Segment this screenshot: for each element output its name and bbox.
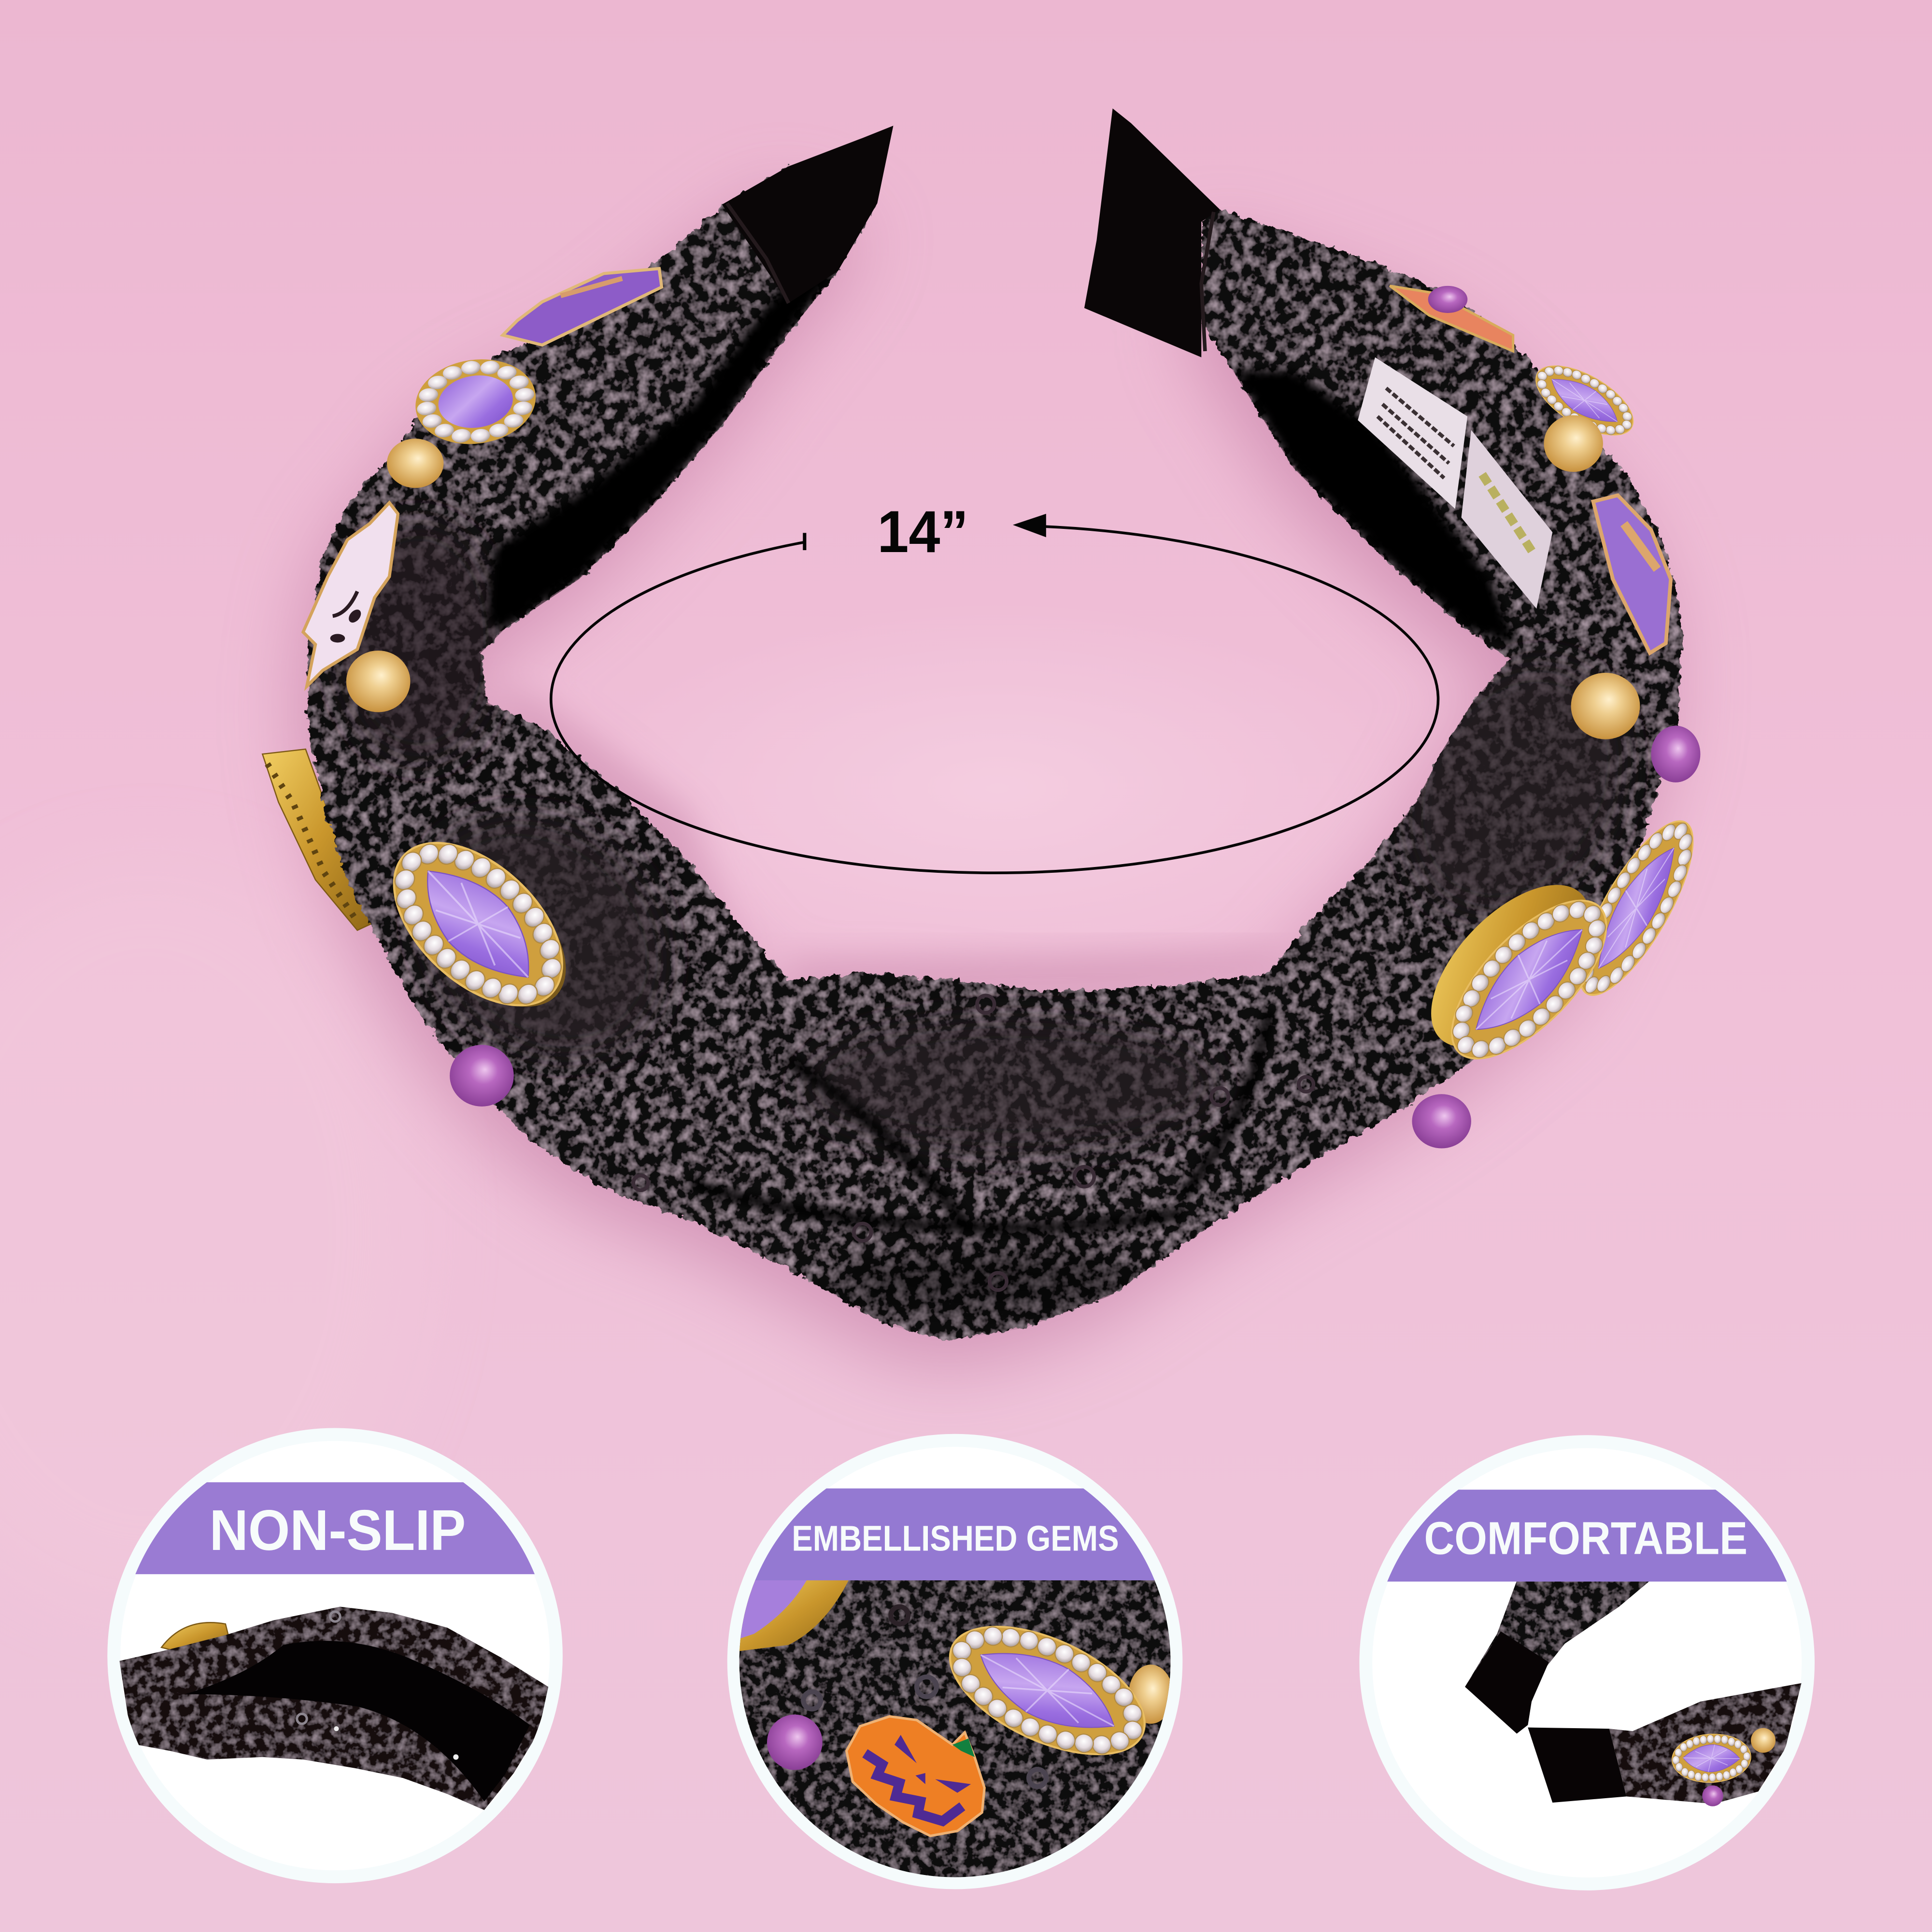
brand label <box>1462 430 1552 609</box>
banner: embellished gems <box>727 1489 1183 1580</box>
pearls on headband <box>346 286 1700 1149</box>
small gold pearl <box>1751 1728 1776 1753</box>
gold scalloped gem backing, left edge <box>262 749 376 930</box>
charm: white ghost <box>303 503 398 686</box>
pumpkin charm <box>847 1717 984 1836</box>
detail: headband underside <box>119 1607 548 1810</box>
detail: headband ends <box>1465 1581 1802 1806</box>
lower arm <box>1609 1683 1802 1804</box>
charm: round purple gem <box>410 352 541 452</box>
measurement label: 14” <box>877 498 968 565</box>
headband photo <box>262 108 1713 1341</box>
velvet end, left <box>722 126 893 303</box>
heading: non-slip: NON-SLIP <box>210 1499 466 1563</box>
sequins on knot <box>633 995 1313 1290</box>
marquise gem <box>931 1601 1164 1780</box>
measurement arc <box>551 514 1438 873</box>
shadow under headband <box>298 194 1672 1368</box>
gold gem corner <box>739 1579 849 1651</box>
gem: far right marquise <box>1559 807 1713 1009</box>
velvet end, right <box>1084 108 1220 357</box>
upper arm <box>1465 1581 1650 1733</box>
panel: comfortable <box>1355 1442 1811 1884</box>
arrowhead <box>1013 514 1046 537</box>
lower velvet tip <box>1528 1728 1626 1803</box>
tweed fabric band <box>308 166 1682 1341</box>
charm: purple witch hat <box>503 269 662 345</box>
banner: comfortable <box>1355 1490 1811 1581</box>
purple pearl <box>767 1715 823 1770</box>
heading: embellished gems: EMBELLISHED GEMS <box>792 1518 1119 1558</box>
small purple pearl <box>1702 1785 1723 1806</box>
care label <box>1358 357 1467 509</box>
gem: front right marquise with gold back <box>1403 857 1631 1083</box>
small gem <box>1671 1732 1752 1784</box>
panel: embellished gems <box>727 1440 1183 1888</box>
charm: purple ghost, right <box>1593 496 1671 653</box>
charm: orange pumpkin, back right <box>1390 286 1513 351</box>
panel: non-slip <box>111 1435 559 1877</box>
gem: large left marquise <box>364 812 594 1036</box>
detail: fabric close-up <box>727 1579 1183 1888</box>
upper velvet tip <box>1465 1632 1549 1733</box>
sequins <box>803 1607 1046 1787</box>
banner: non-slip <box>111 1482 559 1574</box>
gold pearl <box>1129 1664 1173 1724</box>
charm: small gem, back right <box>1525 352 1644 449</box>
heading: comfortable: COMFORTABLE <box>1424 1513 1747 1564</box>
